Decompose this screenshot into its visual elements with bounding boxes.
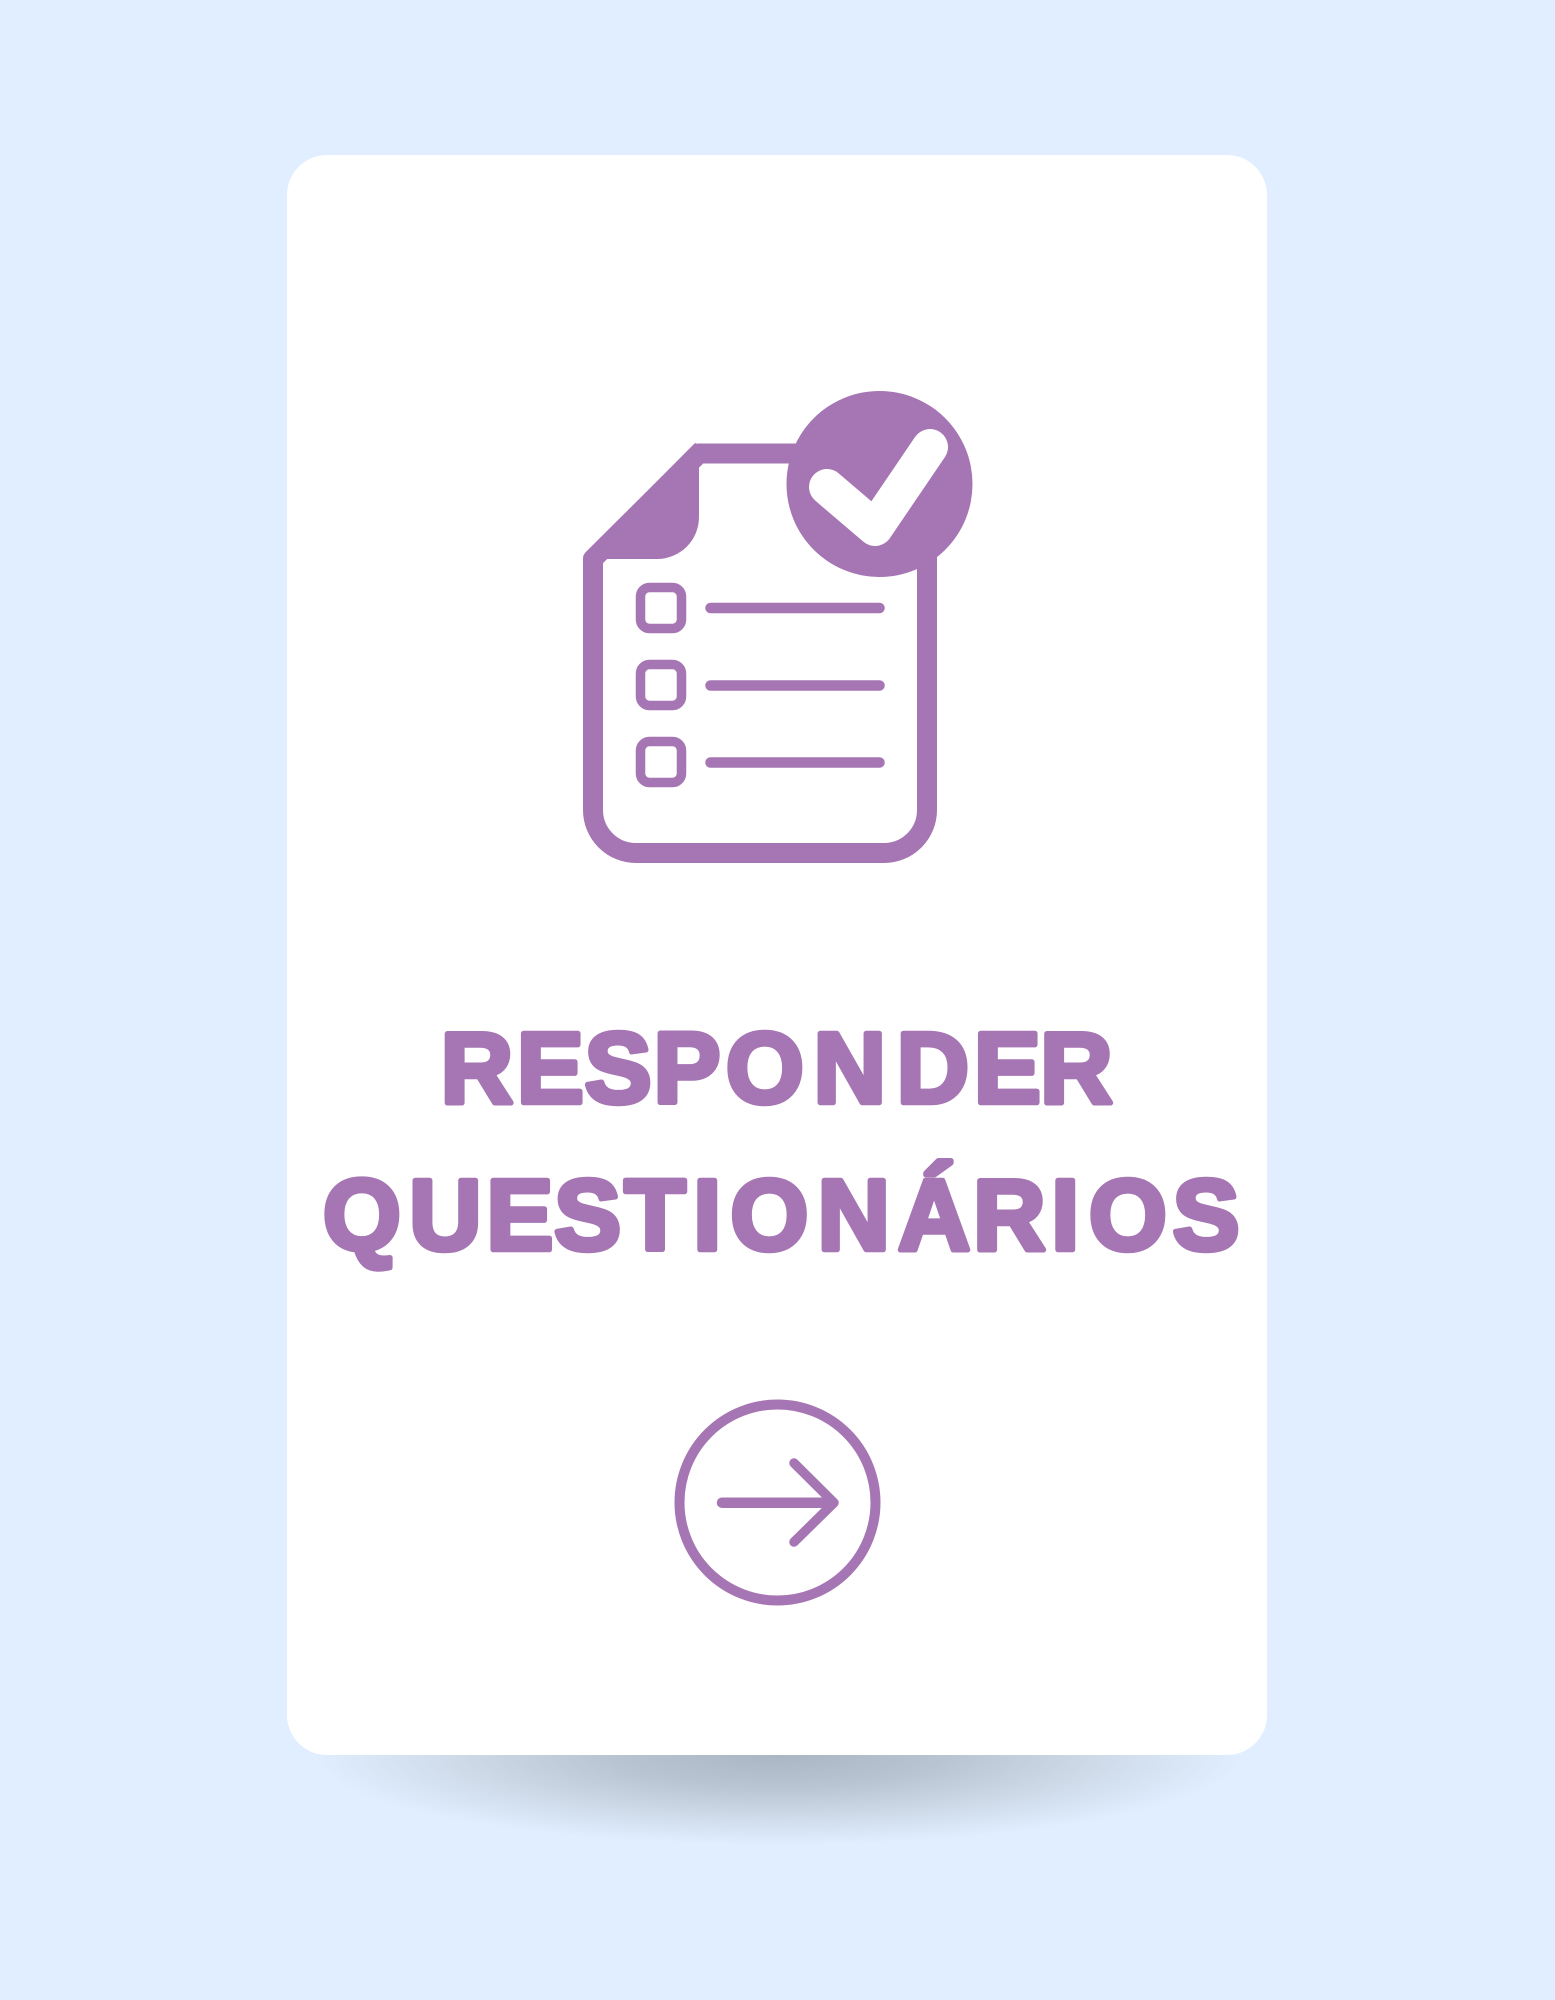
title line 1: RESPONDER (441, 1012, 1112, 1124)
document outline (593, 454, 927, 853)
check badge circle (786, 391, 972, 577)
title line 2: QUESTIONÁRIOS (323, 1160, 1239, 1272)
icon: questionnaire document with check badge (583, 391, 972, 853)
arrow head (794, 1463, 834, 1542)
white check mark (827, 447, 930, 528)
title (323, 1012, 1239, 1272)
checkbox row 1 (640, 588, 880, 628)
folded corner (583, 443, 699, 559)
card shadow (312, 1665, 1244, 1845)
checkbox row 2 (640, 664, 880, 706)
panel: white card (287, 155, 1267, 1755)
icon: arrow in circle (680, 1404, 876, 1600)
arrow shaft (722, 1497, 830, 1508)
arrow circle ring (680, 1404, 876, 1600)
checkbox row 3 (640, 742, 880, 782)
